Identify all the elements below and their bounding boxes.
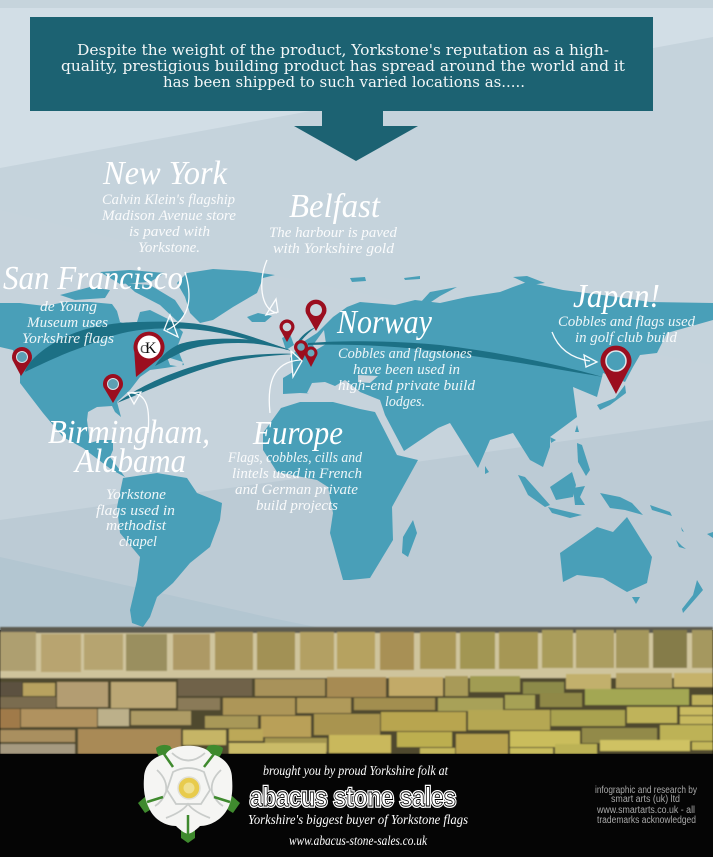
callout: New York: Yorkstone. bbox=[138, 240, 200, 256]
rose petals bbox=[144, 746, 232, 834]
map: Australia bbox=[560, 517, 652, 592]
route: Europe to Japan bbox=[308, 341, 603, 377]
callout: Europe bbox=[227, 415, 362, 514]
map: New Zealand bbox=[682, 580, 703, 613]
map: Madagascar bbox=[402, 520, 417, 557]
pin: New York Calvin Klein bbox=[134, 332, 165, 377]
route: New York to Europe bbox=[155, 339, 292, 366]
shipping routes bbox=[25, 322, 603, 403]
pin: Belfast bbox=[280, 319, 294, 342]
map: Philippines bbox=[577, 443, 590, 476]
callout: Norway: high-end private build bbox=[338, 378, 475, 394]
callout: Japan bbox=[558, 278, 695, 346]
callout: San Francisco: San Francisco bbox=[3, 260, 183, 297]
callout: New York: is paved with bbox=[129, 224, 210, 240]
callout: Europe: build projects bbox=[256, 498, 338, 514]
callout: San Francisco: Museum uses bbox=[26, 315, 108, 331]
callout: Japan: in golf club build bbox=[575, 330, 677, 346]
callout: Birmingham, Alabama: chapel bbox=[119, 534, 157, 550]
wall: course one bbox=[0, 673, 713, 708]
callout: San Francisco bbox=[3, 260, 183, 347]
callout: Norway: lodges. bbox=[385, 394, 425, 410]
banner text bbox=[61, 41, 625, 91]
map: North America bbox=[0, 302, 184, 477]
footer website: www.abacus-stone-sales.co.uk bbox=[289, 834, 428, 849]
callout: Belfast bbox=[269, 188, 397, 257]
callout: Europe: Europe bbox=[252, 415, 343, 452]
icon: CK logo bbox=[140, 338, 157, 357]
pin: San Francisco bbox=[12, 347, 32, 376]
map: Japan bbox=[597, 385, 626, 410]
wall: course two bbox=[0, 689, 713, 715]
footer bbox=[0, 745, 713, 857]
wall: coping stones bbox=[0, 630, 713, 672]
callout: Birmingham, Alabama: methodist bbox=[106, 518, 167, 534]
map: Iceland bbox=[247, 313, 272, 322]
icon: Yorkshire rose bbox=[138, 745, 240, 843]
callout: Japan: Cobbles and flags used bbox=[558, 314, 695, 330]
credits bbox=[595, 785, 697, 826]
map: Arctic Canada islands bbox=[100, 270, 165, 284]
callout: Birmingham, Alabama: Yorkstone bbox=[106, 487, 166, 503]
route: Europe to Norway bbox=[296, 327, 316, 345]
credits: smart arts (uk) ltd bbox=[611, 794, 680, 805]
callout: San Francisco: Yorkshire flags bbox=[22, 331, 114, 347]
map: Java bbox=[548, 507, 582, 518]
banner text: has been shipped to such varied locations as..... bbox=[163, 73, 525, 91]
arrow: Birmingham bbox=[128, 392, 149, 433]
rose green barbs bbox=[147, 754, 230, 834]
rose sepals bbox=[138, 745, 240, 843]
rose centre bbox=[178, 777, 200, 799]
icon: CK logo: K bbox=[145, 340, 157, 357]
callout: New York: Calvin Klein's flagship bbox=[102, 192, 235, 208]
callout: Belfast: with Yorkshire gold bbox=[273, 241, 395, 257]
map: Sri Lanka bbox=[485, 466, 489, 474]
callout: Norway bbox=[336, 304, 475, 410]
arrow: New York bbox=[164, 272, 189, 337]
map: Novaya Zemlya bbox=[420, 287, 457, 304]
map: Eurasia bbox=[283, 282, 713, 468]
footer tagline: brought you by proud Yorkshire folk at bbox=[263, 764, 449, 779]
callout: New York: Madison Avenue store bbox=[101, 208, 236, 224]
map: UK bbox=[282, 334, 294, 350]
inland seas and lakes bbox=[167, 330, 378, 396]
pin: Europe west bbox=[294, 340, 308, 361]
callout: New York bbox=[101, 155, 236, 256]
route: Birmingham to Europe bbox=[117, 354, 297, 403]
callout: Birmingham, Alabama bbox=[48, 414, 210, 550]
logo: abacus stone sales: abacus stone sales bbox=[250, 782, 456, 812]
callout: Norway: Cobbles and flagstones bbox=[338, 346, 472, 362]
background sky with diagonal bands bbox=[0, 0, 713, 630]
credits: www.smartarts.co.uk - all bbox=[596, 805, 695, 816]
map: Greenland bbox=[177, 269, 275, 323]
arrow: Europe bbox=[269, 351, 302, 413]
route: San Francisco to Europe bbox=[25, 322, 292, 372]
wall: coping mortar band bbox=[0, 632, 713, 678]
map: New Guinea bbox=[600, 493, 643, 515]
stone wall bbox=[0, 627, 713, 754]
pin: Europe east bbox=[304, 347, 317, 367]
world map bbox=[0, 269, 713, 627]
callout: Japan: Japan! bbox=[573, 278, 660, 315]
callout: Belfast: Belfast bbox=[289, 188, 381, 225]
map: Baffin Island bbox=[125, 283, 185, 322]
callout: Birmingham, Alabama: Birmingham, bbox=[48, 414, 210, 451]
logo: abacus stone sales: abacus stone sales bbox=[250, 782, 456, 812]
callout: Europe: and German private bbox=[235, 482, 358, 498]
callout: New York: New York bbox=[102, 155, 228, 192]
wall: course three bbox=[0, 707, 713, 737]
credits: trademarks acknowledged bbox=[597, 815, 696, 826]
callout: Belfast: The harbour is paved bbox=[269, 225, 397, 241]
map: Arctic islands bbox=[513, 276, 545, 285]
map: Sulawesi bbox=[573, 486, 585, 505]
pin: Norway bbox=[305, 300, 326, 331]
banner text: Despite the weight of the product, Yorkstone's reputation as a high- bbox=[77, 41, 609, 59]
arrow: banner pointing down bbox=[294, 111, 418, 161]
pin: Japan bbox=[600, 346, 632, 394]
callout: San Francisco: de Young bbox=[40, 299, 98, 315]
wall: course four bbox=[0, 725, 713, 754]
callout: Birmingham, Alabama: flags used in bbox=[96, 503, 175, 519]
icon: CK logo: c bbox=[140, 338, 148, 357]
callout: Europe: Flags, cobbles, cills and bbox=[227, 450, 362, 466]
map: Sumatra bbox=[518, 475, 550, 507]
callout: Norway: have been used in bbox=[353, 362, 460, 378]
map: Borneo bbox=[550, 472, 576, 500]
callout: Birmingham, Alabama: Alabama bbox=[73, 443, 186, 480]
arrow: Japan bbox=[552, 332, 597, 367]
callout: Europe: lintels used in French bbox=[232, 466, 362, 482]
map: South America bbox=[117, 473, 222, 627]
map: Africa bbox=[263, 402, 418, 580]
banner bbox=[30, 17, 653, 111]
banner text: quality, prestigious building product has spread around the world and it bbox=[61, 57, 625, 75]
map: Taiwan and Hainan bbox=[575, 425, 579, 432]
rose inner details bbox=[155, 753, 223, 818]
footer strapline: Yorkshire's biggest buyer of Yorkstone flags bbox=[248, 813, 468, 828]
callout: Norway: Norway bbox=[336, 304, 433, 341]
arrow: Belfast bbox=[262, 260, 278, 315]
pin: Birmingham bbox=[103, 374, 123, 403]
